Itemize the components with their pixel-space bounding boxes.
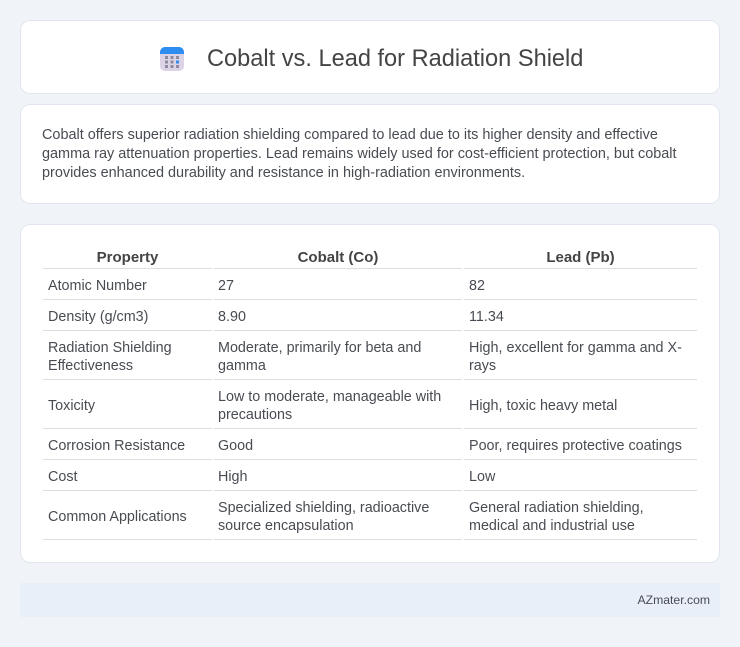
comparison table: High, toxic heavy metal <box>469 398 617 414</box>
comparison table: Radiation Shielding <box>48 340 172 356</box>
comparison table: Moderate, primarily for beta and <box>218 340 421 356</box>
comparison table: Common Applications <box>48 509 187 525</box>
panel: summary <box>20 104 720 204</box>
comparison table: medical and industrial use <box>469 518 635 534</box>
comparison table: 82 <box>469 278 485 294</box>
comparison table: Specialized shielding, radioactive <box>218 500 429 516</box>
comparison table: Toxicity <box>48 398 95 414</box>
icon: calendar grid <box>160 47 184 71</box>
summary text: Cobalt offers superior radiation shielding compared to lead due to its higher density and effective <box>42 127 658 143</box>
comparison table: Density (g/cm3) <box>48 309 148 325</box>
comparison table: Low <box>469 469 495 485</box>
summary text <box>42 127 677 181</box>
comparison table: Poor, requires protective coatings <box>469 438 682 454</box>
comparison table: Corrosion Resistance <box>48 438 185 454</box>
comparison table: Effectiveness <box>48 358 133 374</box>
header: Lead: Lead (Pb) <box>546 249 615 266</box>
comparison table: rays <box>469 358 496 374</box>
comparison table: High <box>218 469 248 485</box>
title: Cobalt vs. Lead for Radiation Shield <box>207 46 583 72</box>
comparison table: source encapsulation <box>218 518 354 534</box>
comparison table: precautions <box>218 407 292 423</box>
header: Cobalt: Cobalt (Co) <box>298 249 378 266</box>
comparison table: Good <box>218 438 253 454</box>
header: Property: Property <box>97 249 158 266</box>
comparison table: 8.90 <box>218 309 246 325</box>
summary text: provides enhanced durability and resistance in high-radiation environments. <box>42 165 525 181</box>
summary text: gamma ray attenuation properties. Lead remains widely used for cost-efficient protection, but cobalt <box>42 146 677 162</box>
comparison table: High, excellent for gamma and X- <box>469 340 682 356</box>
comparison table: gamma <box>218 358 266 374</box>
panel: title header <box>20 20 720 94</box>
comparison table: 27 <box>218 278 234 294</box>
comparison table: Low to moderate, manageable with <box>218 389 441 405</box>
footer bar <box>20 583 720 617</box>
footer credit: AZmater.com <box>638 593 710 607</box>
comparison table: General radiation shielding, <box>469 500 644 516</box>
panel: comparison table <box>20 224 720 563</box>
comparison table: Atomic Number <box>48 278 147 294</box>
comparison table: Cost <box>48 469 78 485</box>
comparison table: 11.34 <box>469 309 504 325</box>
